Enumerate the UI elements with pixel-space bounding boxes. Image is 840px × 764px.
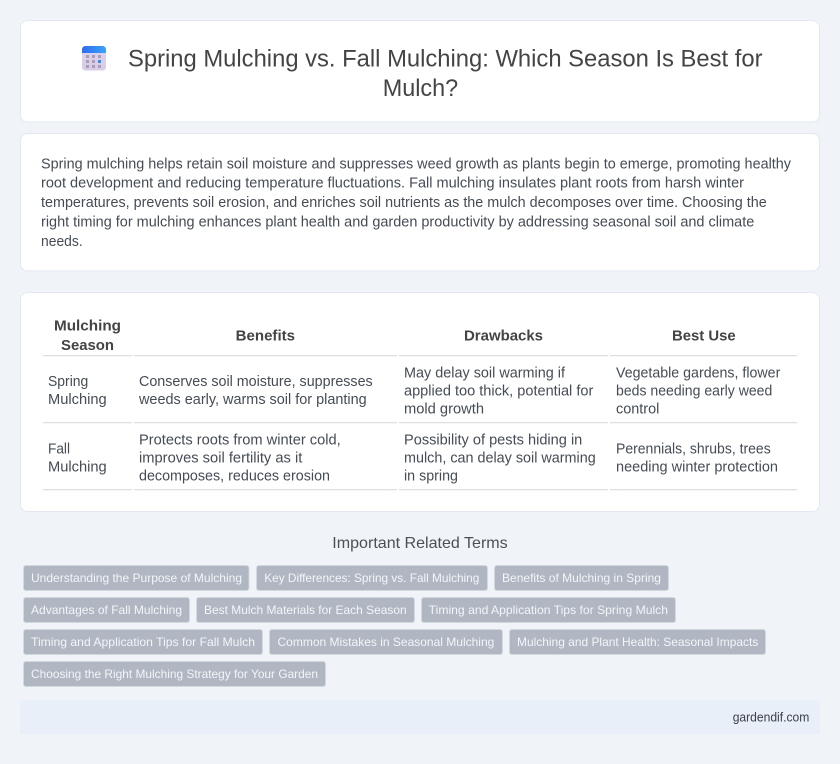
tag <box>256 566 488 590</box>
table header row: Mulching <box>54 318 121 335</box>
tag <box>494 566 668 590</box>
text block: introduction paragraph: needs. <box>41 234 83 250</box>
tag: Best Mulch Materials for Each Season <box>204 603 407 617</box>
table row: spring mulching: Mulching <box>48 392 107 408</box>
tag: Understanding the Purpose of Mulching <box>31 571 242 585</box>
table row: fall mulching: Possibility of pests hiding in <box>404 432 582 448</box>
tag <box>24 566 249 590</box>
text block: introduction paragraph <box>41 156 792 250</box>
heading: important related terms: Important Related Terms <box>332 535 508 552</box>
tag <box>422 598 676 622</box>
tag: Benefits of Mulching in Spring <box>502 571 661 585</box>
tag: Mulching and Plant Health: Seasonal Impacts <box>517 635 758 649</box>
table row: spring mulching: Conserves soil moisture, suppresses <box>139 374 373 390</box>
tag: Advantages of Fall Mulching <box>31 603 182 617</box>
table row: spring mulching: weeds early, warms soil for planting <box>138 392 367 408</box>
footer: gardendif.com <box>733 710 809 724</box>
table row: fall mulching: improves soil fertility as it <box>139 450 302 466</box>
table row: spring mulching <box>48 365 780 417</box>
text block: introduction paragraph: temperatures, prevents soil erosion, and enriches soil nutrients as the mulch decomposes over time. Choosing the <box>41 195 767 211</box>
tag <box>24 598 190 622</box>
tag <box>24 662 326 686</box>
table row: fall mulching: mulch, can delay soil warming <box>404 450 596 466</box>
table header row: Drawbacks <box>464 328 543 345</box>
title: Mulch? <box>383 75 458 102</box>
table header row <box>54 318 736 354</box>
table row: spring mulching: Vegetable gardens, flower <box>616 365 780 381</box>
tag: Timing and Application Tips for Spring Mulch <box>429 603 668 617</box>
panel: header <box>20 20 820 122</box>
table row: fall mulching: Fall <box>48 441 70 457</box>
table row: fall mulching: in spring <box>404 468 458 484</box>
tag <box>196 598 414 622</box>
table row: spring mulching: applied too thick, potential for <box>404 383 593 399</box>
related terms tags <box>24 566 766 686</box>
panel: introduction <box>20 134 820 271</box>
title: Spring Mulching vs. Fall Mulching: Which Season Is Best for <box>128 46 763 72</box>
table row: fall mulching: Protects roots from winter cold, <box>139 432 341 448</box>
tag <box>270 630 502 654</box>
text block: introduction paragraph: Spring mulching helps retain soil moisture and suppresses weed growth as plants begin to emerge, promoting healthy <box>41 156 792 172</box>
icon: calendar <box>82 46 106 70</box>
tag: Common Mistakes in Seasonal Mulching <box>278 635 494 649</box>
table row: spring mulching: mold growth <box>404 401 484 417</box>
tag <box>510 630 766 654</box>
table row: fall mulching: decomposes, reduces erosion <box>139 468 330 484</box>
table row: spring mulching: May delay soil warming if <box>404 365 566 381</box>
tag: Key Differences: Spring vs. Fall Mulching <box>264 571 479 585</box>
table row: fall mulching: Mulching <box>48 459 107 475</box>
table row: spring mulching: control <box>616 401 659 417</box>
tag <box>24 630 262 654</box>
panel: comparison table <box>20 292 820 512</box>
title <box>128 46 763 102</box>
table row: spring mulching: Spring <box>48 374 88 390</box>
text block: introduction paragraph: right timing for mulching enhances plant health and garden productivity by addressing seasonal soil and climate <box>41 215 754 231</box>
table header row: Season <box>61 337 114 354</box>
table row: fall mulching <box>48 432 778 484</box>
table header row: Best Use <box>672 328 736 345</box>
table row: spring mulching: beds needing early weed <box>616 383 772 399</box>
table header row: Benefits <box>236 328 295 345</box>
tag: Choosing the Right Mulching Strategy for Your Garden <box>31 667 318 681</box>
table row: fall mulching: needing winter protection <box>616 459 778 475</box>
text block: introduction paragraph: root development and reducing temperature fluctuations. Fall mulching insulates plant roots from harsh winter <box>41 176 744 192</box>
table row: fall mulching: Perennials, shrubs, trees <box>616 441 771 457</box>
tag: Timing and Application Tips for Fall Mulch <box>31 635 255 649</box>
footer <box>20 700 820 734</box>
